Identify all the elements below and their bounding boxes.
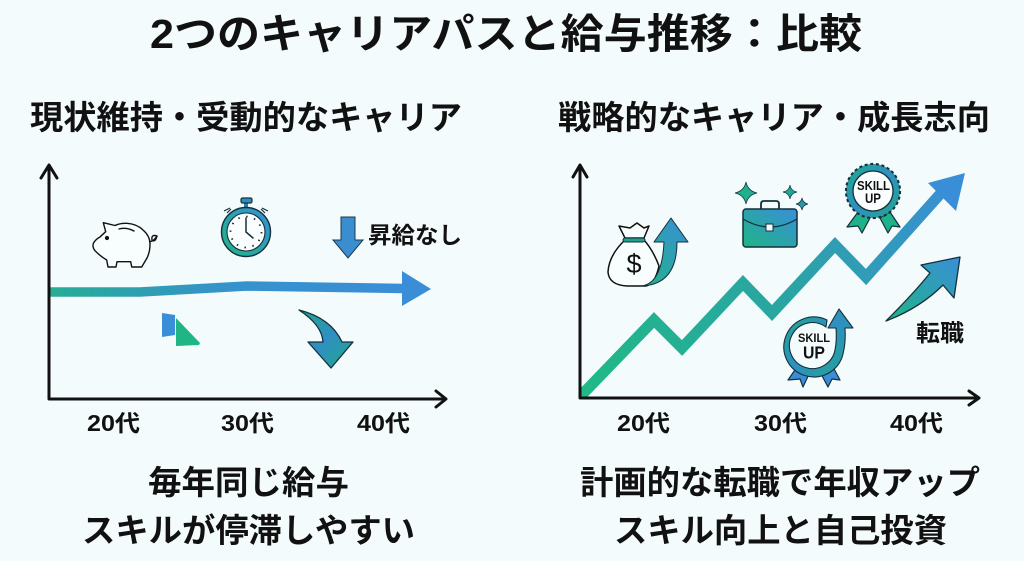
labels: left x-axis — [87, 410, 410, 436]
panel: right chart — [572, 164, 979, 405]
chart axes — [41, 165, 446, 407]
icon: skill up badge bottom: SKILL — [798, 333, 830, 345]
label: job change: 転職 — [916, 320, 965, 346]
icon: briefcase with sparkles — [735, 182, 808, 247]
icon: skill up badge top — [846, 164, 900, 233]
icon: curved down arrow — [299, 310, 353, 368]
text block: left summary — [82, 464, 415, 549]
icon: stopwatch — [222, 198, 270, 256]
icon: skill up badge top: SKILL — [857, 178, 890, 193]
icon: skill up badge bottom — [784, 309, 853, 387]
labels: left x-axis: 20代 — [87, 410, 140, 436]
label: no promotion: 昇給なし — [368, 222, 462, 248]
labels: right x-axis: 30代 — [754, 410, 807, 436]
heading: right: 戦略的なキャリア・成長志向 — [558, 99, 990, 136]
chart axes — [573, 165, 979, 405]
text block: right summary — [580, 464, 980, 549]
text block: left summary: スキルが停滞しやすい — [82, 512, 415, 549]
icon: skill up badge top: UP — [865, 191, 881, 206]
rising salary arrow — [572, 173, 965, 405]
icon: money bag — [608, 218, 688, 286]
icon: skill up badge bottom: UP — [803, 342, 825, 362]
icon: down arrow — [333, 217, 363, 258]
icon: piggy bank — [93, 223, 157, 267]
heading: left: 現状維持・受動的なキャリア — [30, 99, 462, 136]
flat salary arrow — [50, 271, 431, 306]
panel: left chart — [41, 165, 462, 407]
icon: money bag: $ — [626, 249, 642, 279]
labels: left x-axis: 30代 — [221, 410, 274, 436]
labels: right x-axis: 20代 — [617, 410, 670, 436]
text block: right summary: 計画的な転職で年収アップ — [580, 464, 980, 501]
labels: left x-axis: 40代 — [357, 410, 410, 436]
title: 2つのキャリアパスと給与推移：比較 — [150, 11, 862, 57]
labels: right x-axis — [617, 410, 943, 436]
text block: right summary: スキル向上と自己投資 — [614, 512, 947, 549]
icon: broken shape — [162, 313, 200, 346]
labels: right x-axis: 40代 — [890, 410, 943, 436]
text block: left summary: 毎年同じ給与 — [148, 464, 349, 501]
icon: job change arrow — [886, 257, 960, 321]
